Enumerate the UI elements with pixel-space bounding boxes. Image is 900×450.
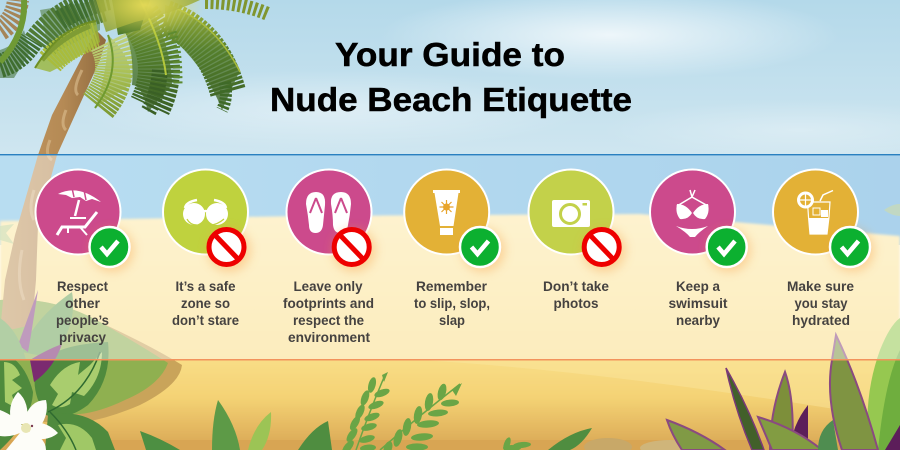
white flower: [0, 392, 58, 450]
label: Don’t take: [543, 278, 609, 294]
rocks: [584, 438, 632, 450]
right plant with purple-edged leaves: [667, 318, 900, 450]
hill at lower left: [0, 299, 182, 422]
leaf: large centre: [34, 342, 109, 417]
title: Nude Beach Etiquette: [270, 81, 632, 118]
fern: small: [502, 436, 531, 450]
label: Respect: [57, 278, 108, 294]
badge: check: [707, 227, 751, 272]
item 5: no photos: [528, 170, 626, 311]
icon: camera: [552, 200, 590, 227]
label: footprints and: [283, 295, 374, 311]
palm trunk: [0, 30, 106, 332]
label: privacy: [59, 329, 106, 345]
translucent content band: [0, 155, 900, 360]
purple leaf: [30, 344, 62, 382]
badge: prohibited: [332, 228, 376, 272]
label: you stay: [794, 295, 848, 311]
label: don’t stare: [172, 312, 239, 328]
item 1: respect privacy: [36, 170, 134, 345]
label: nearby: [676, 312, 720, 328]
label: other: [65, 295, 101, 311]
item 6: keep a swimsuit: [650, 170, 751, 328]
icon: bikini: [676, 190, 709, 237]
frond: lower centre: [95, 35, 131, 108]
label: hydrated: [792, 312, 850, 328]
label: It’s a safe: [176, 278, 236, 294]
fern: right: [380, 383, 462, 450]
label: [414, 278, 490, 328]
label: [283, 278, 374, 345]
frond: far left: [0, 0, 32, 78]
label: [56, 278, 109, 345]
badge: prohibited: [582, 228, 626, 272]
label: zone so: [181, 295, 230, 311]
label: slap: [439, 312, 465, 328]
frond: lime left: [35, 21, 100, 72]
label: [787, 278, 854, 328]
label: [543, 278, 609, 311]
item 7: stay hydrated: [773, 170, 874, 328]
frond: top right: [205, 2, 268, 14]
frond: right big: [165, 5, 240, 110]
label: people’s: [56, 312, 109, 328]
left foliage plants: [0, 290, 115, 450]
distant palm leaf right: [884, 204, 900, 216]
label: swimsuit: [668, 295, 728, 311]
item 4: slip slop slap: [404, 170, 505, 328]
icon: sunscreen tube: [433, 190, 460, 235]
icon: flip flops: [306, 192, 351, 233]
palm fronds: [0, 0, 268, 112]
icon: sunglasses: [183, 200, 228, 225]
leaves in band: [22, 292, 73, 358]
badge: check: [460, 227, 505, 272]
bottom centre plants: [140, 372, 700, 450]
frond: top left striped: [40, 0, 110, 55]
title: Your Guide to: [335, 36, 565, 73]
badge: prohibited: [207, 228, 251, 272]
item 2: don't stare: [163, 170, 251, 328]
leaf: lower: [45, 412, 115, 450]
distant palm leaf left: [0, 224, 14, 244]
title: [270, 36, 632, 118]
label: [172, 278, 239, 328]
label: Leave only: [294, 278, 363, 294]
fern: left: [340, 372, 391, 450]
label: to slip, slop,: [414, 295, 490, 311]
badge: check: [830, 227, 874, 272]
leaf: left: [0, 352, 33, 450]
label: Make sure: [787, 278, 854, 294]
frond: centre dark: [112, 0, 172, 112]
label: [668, 278, 728, 328]
badge: check: [90, 227, 134, 272]
icon: beach umbrella and lounger: [57, 188, 101, 235]
label: photos: [554, 295, 599, 311]
label: Keep a: [676, 278, 720, 294]
label: environment: [288, 329, 370, 345]
icon: cold drink: [797, 190, 833, 234]
label: respect the: [293, 312, 364, 328]
item 3: footprints only: [283, 170, 376, 345]
label: Remember: [416, 278, 488, 294]
